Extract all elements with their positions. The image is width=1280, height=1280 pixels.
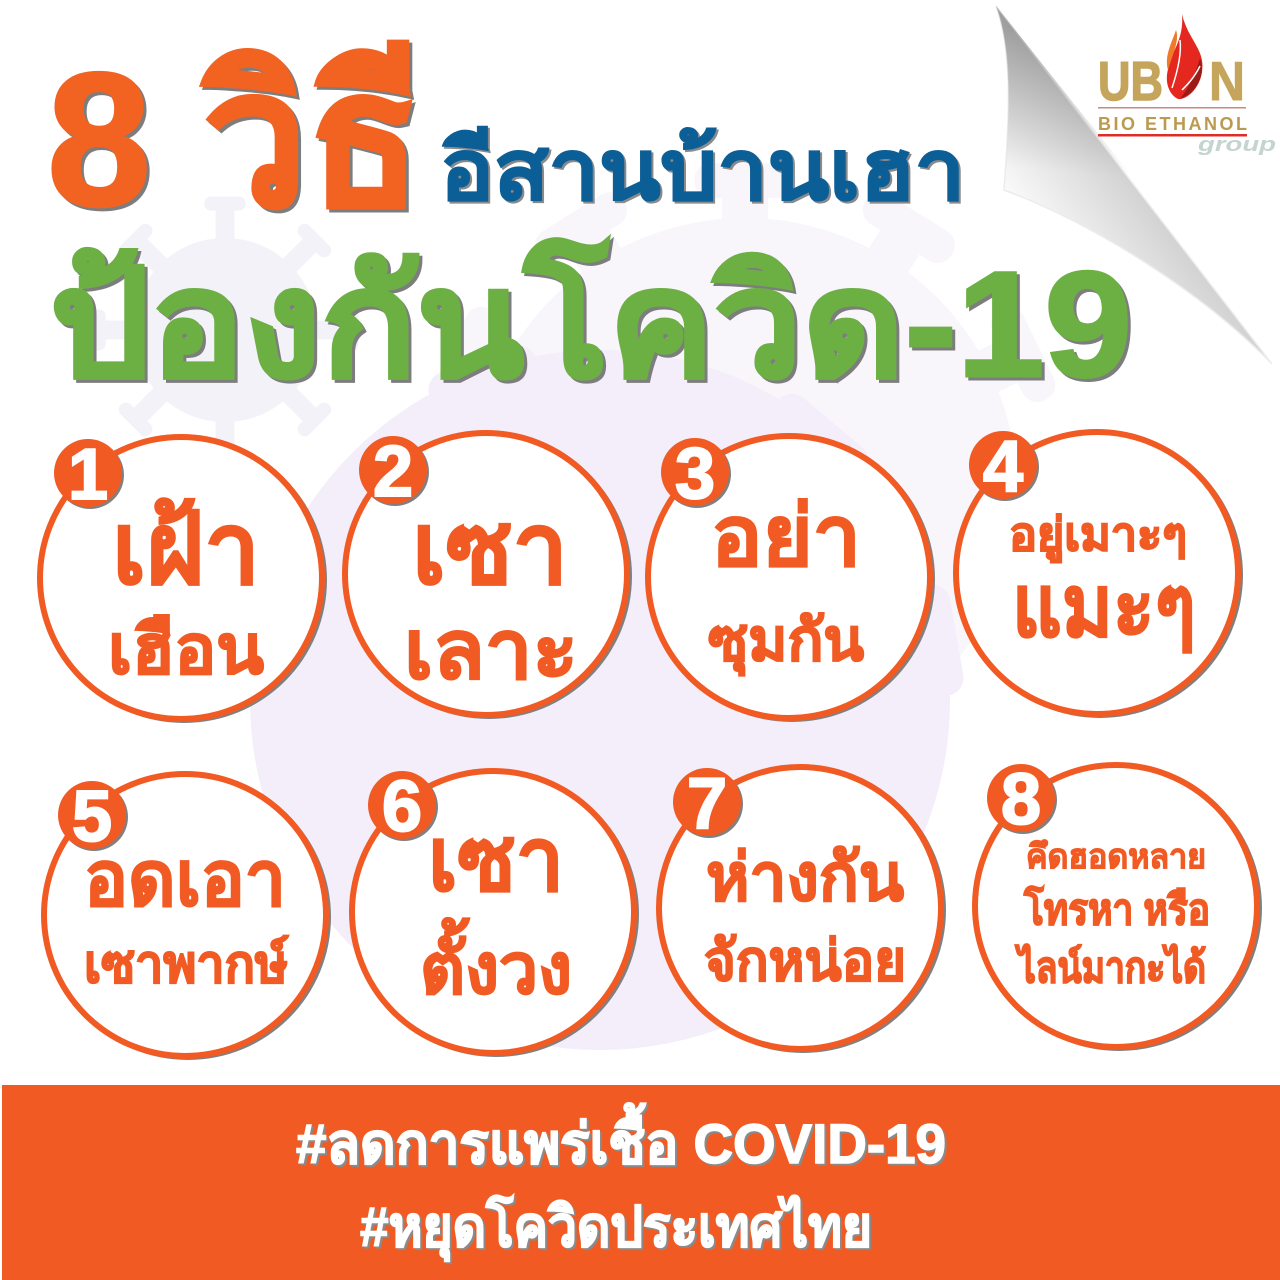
badge 2: [359, 432, 429, 512]
text: เฮือน: เฮือน: [108, 612, 264, 688]
panel: way 6: [352, 767, 639, 1057]
text: โทรหา หรือ: โทรหา หรือ: [1023, 885, 1210, 933]
badge 5: [58, 777, 128, 857]
panel: way 8: [975, 760, 1262, 1051]
text: เซาพากษ์: เซาพากษ์: [84, 935, 289, 994]
badge 2: 2: [373, 432, 413, 512]
badge 7: 7: [687, 764, 727, 844]
background: virus watermark: [2, 163, 1280, 1090]
logo wordmark: UB: [1098, 50, 1163, 112]
text: เฝ้า: เฝ้า: [112, 493, 260, 605]
text: คึดฮอดหลาย: คึดฮอดหลาย: [1026, 838, 1206, 876]
logo subtitle: BIO ETHANOL: [1098, 114, 1247, 134]
badge 6: 6: [382, 767, 422, 847]
badge 7: [673, 764, 743, 844]
logo: Ubon Bio Ethanol group: [1098, 14, 1276, 156]
text: อยู่เมาะๆ: อยู่เมาะๆ: [1009, 508, 1187, 563]
badge 3: 3: [675, 434, 715, 514]
text: ไลน์มากะได้: ไลน์มากะได้: [1015, 943, 1206, 991]
panel: way 2: [345, 432, 632, 719]
logo group tag: group: [1197, 134, 1276, 156]
badge 4: [969, 427, 1039, 507]
text: แมะๆ: แมะๆ: [1012, 559, 1196, 655]
text: ตั้งวง: ตั้งวง: [420, 917, 572, 1008]
badge 3: [661, 434, 731, 514]
badge 1: [54, 435, 124, 515]
text: อย่า: อย่า: [711, 489, 861, 583]
logo flame: [1167, 14, 1203, 99]
text: ซุมกัน: ซุมกัน: [708, 608, 864, 677]
subtitle: อีสานบ้านเฮา: อีสานบ้านเฮา: [440, 123, 965, 217]
title: ป้องกันโควิด-19: ป้องกันโควิด-19: [50, 237, 1132, 408]
badge 6: [368, 767, 438, 847]
page curl corner: [996, 6, 1272, 364]
text: อดเอา: อดเอา: [84, 837, 286, 922]
text: เซา: เซา: [428, 810, 564, 909]
panel: way 5: [44, 774, 331, 1060]
text: เซา: เซา: [412, 493, 568, 605]
text: เลาะ: เลาะ: [404, 605, 578, 696]
panel: way 4: [956, 427, 1243, 718]
text: ห่างกัน: ห่างกัน: [706, 840, 904, 914]
badge 8: [987, 760, 1057, 840]
badge 5: 5: [72, 777, 112, 857]
footer banner: [2, 1085, 1280, 1280]
title: 8 วิธี: 8 วิธี: [47, 34, 422, 246]
panel: way 1: [40, 435, 327, 723]
panel: way 3: [648, 434, 935, 722]
logo letter N: N: [1209, 50, 1245, 112]
badge 4: 4: [983, 427, 1023, 507]
badge 1: 1: [68, 435, 108, 515]
hashtag 1: #ลดการแพร่เชื้อ COVID-19: [296, 1103, 946, 1175]
badge 8: 8: [1001, 760, 1041, 840]
panel: way 7: [659, 764, 946, 1053]
hashtag 2: #หยุดโควิดประเทศไทย: [360, 1194, 872, 1262]
text: จักหน่อย: จักหน่อย: [704, 929, 906, 992]
